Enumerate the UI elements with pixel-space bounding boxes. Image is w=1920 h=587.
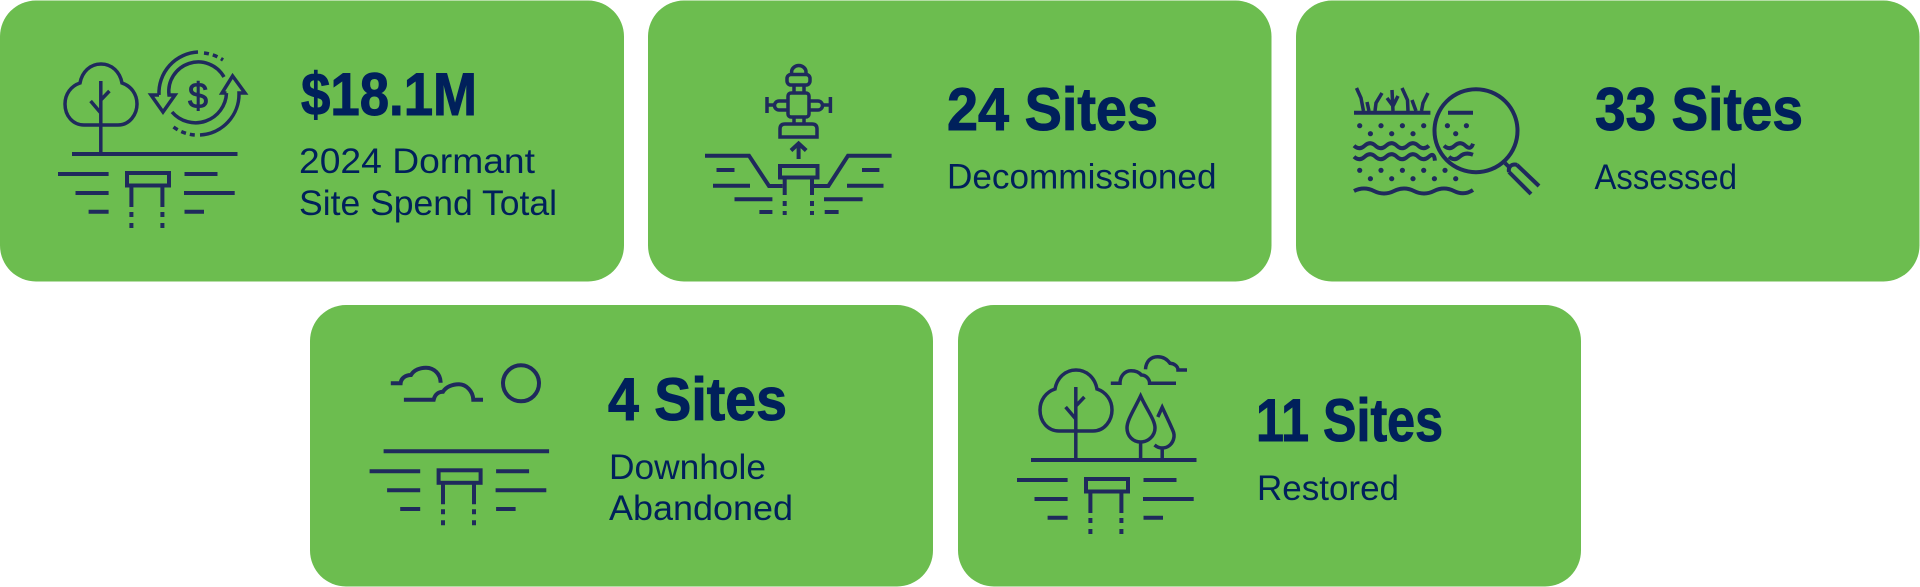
icon: tree, money cycle and capped well: $: [188, 75, 208, 116]
panel: restored sites: [958, 305, 1581, 586]
stat: 11 Sites: 11 Sites: [1256, 387, 1443, 454]
label: Assessed: Assessed: [1594, 158, 1737, 197]
label: Restored: Restored: [1257, 469, 1399, 508]
stat: 33 Sites: 33 Sites: [1595, 76, 1803, 143]
label: Downhole Abandoned: Abandoned: [609, 489, 793, 528]
icon: trees, clouds and capped well: [1017, 357, 1196, 534]
panel: downhole abandoned sites: [310, 305, 933, 586]
icon: wellhead removed from excavation: [705, 65, 892, 215]
panel: 2024 dormant site spend: [0, 0, 624, 282]
stat: 24 Sites: 24 Sites: [947, 76, 1158, 143]
stat: $18.1M: $18.1M: [301, 61, 477, 128]
panel: assessed sites: [1296, 0, 1920, 282]
icon: clouds, sun and capped well: [370, 365, 549, 525]
icon: tree, money cycle and capped well: [58, 52, 245, 228]
icon: soil layers under magnifying glass: [1354, 88, 1539, 194]
label: 2024 Dormant Site Spend Total: Site Spend Total: [299, 184, 557, 223]
label: Decommissioned: Decommissioned: [947, 158, 1216, 197]
panel: decommissioned sites: [648, 0, 1272, 282]
label: 2024 Dormant Site Spend Total: 2024 Dormant: [299, 142, 535, 181]
stat: 4 Sites: 4 Sites: [608, 366, 787, 433]
label: Downhole Abandoned: Downhole: [609, 448, 766, 487]
